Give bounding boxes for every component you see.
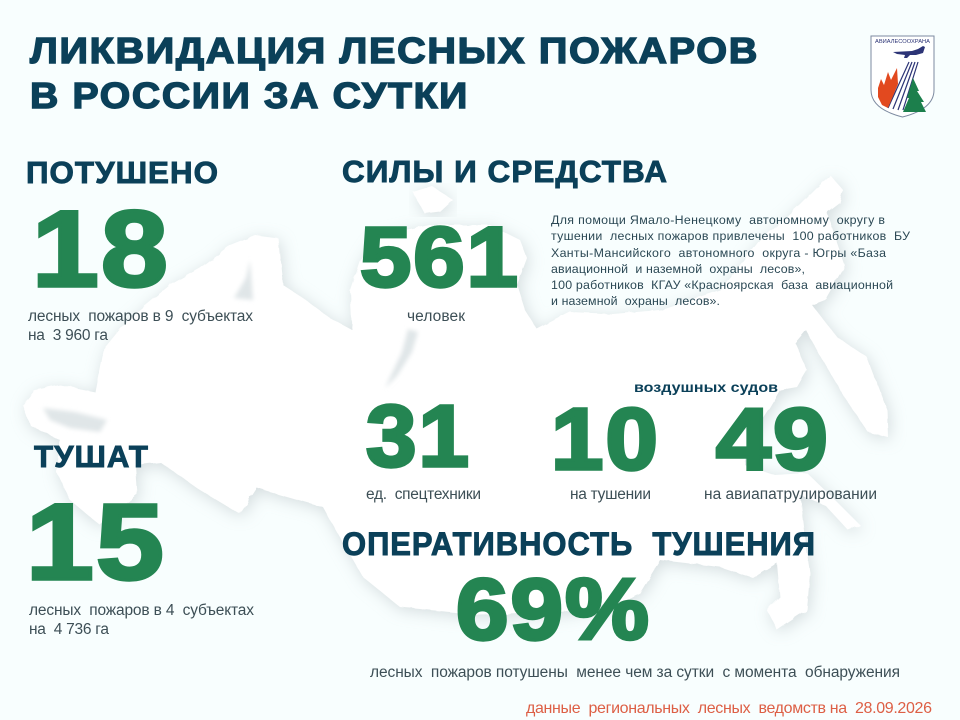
title: В РОССИИ ЗА СУТКИ bbox=[30, 75, 469, 116]
text block: assistance note: 100 работников КГАУ «Красноярская база авиационной bbox=[551, 278, 893, 292]
text block: assistance note: тушении лесных пожаров привлечены 100 работников БУ bbox=[551, 229, 910, 243]
description: лесных пожаров в 9 субъектах bbox=[28, 308, 253, 325]
heading: forces: СИЛЫ И СРЕДСТВА bbox=[342, 154, 668, 189]
heading: potusheno: ПОТУШЕНО bbox=[26, 155, 219, 190]
text block: assistance note: Для помощи Ямало-Ненецкому автономному округу в bbox=[551, 213, 885, 227]
panel: efficiency bbox=[342, 526, 900, 681]
description bbox=[29, 602, 254, 638]
number: 49: 49 bbox=[716, 391, 830, 488]
map of Russia bbox=[23, 175, 888, 630]
text block: assistance note: Ханты-Мансийского автономного округа - Югры «База bbox=[551, 246, 886, 260]
number: 15: 15 bbox=[26, 481, 166, 602]
panel: extinguished bbox=[26, 155, 253, 344]
panel: burning bbox=[26, 439, 254, 638]
description bbox=[28, 308, 253, 344]
description: на 3 960 га bbox=[28, 327, 108, 344]
number: 69%: 69% bbox=[456, 562, 651, 658]
title bbox=[30, 30, 759, 116]
number: 10: 10 bbox=[551, 391, 660, 488]
number: 18: 18 bbox=[32, 188, 170, 309]
description: лесных пожаров в 4 субъектах bbox=[29, 602, 254, 619]
label: people: человек bbox=[407, 308, 465, 325]
label: air patrol: на авиапатрулировании bbox=[704, 486, 877, 503]
number: 31: 31 bbox=[366, 388, 471, 485]
inland seas and gulfs bbox=[43, 260, 418, 432]
panel: forces and means bbox=[342, 154, 910, 503]
label: firefighting: на тушении bbox=[570, 486, 651, 503]
heading: efficiency: ОПЕРАТИВНОСТЬ ТУШЕНИЯ bbox=[342, 526, 816, 562]
label: aircraft: воздушных судов bbox=[634, 379, 778, 395]
label: special equipment: ед. спецтехники bbox=[366, 486, 481, 503]
description: на 4 736 га bbox=[29, 621, 109, 638]
description: лесных пожаров потушены менее чем за сутки с момента обнаружения bbox=[370, 664, 900, 681]
logo: Avialesookhrana shield: АВИАЛЕСООХРАНА bbox=[875, 39, 931, 45]
number: 561: 561 bbox=[360, 210, 520, 304]
text block: assistance note bbox=[551, 213, 910, 308]
logo: Avialesookhrana shield bbox=[871, 36, 934, 117]
heading: tushat: ТУШАТ bbox=[34, 439, 149, 474]
text block: assistance note: авиационной и наземной охраны лесов», bbox=[551, 262, 805, 276]
source note: данные региональных лесных ведомств на 28.09.2026 bbox=[526, 700, 932, 717]
text block: assistance note: и наземной охраны лесов». bbox=[551, 294, 720, 308]
title: ЛИКВИДАЦИЯ ЛЕСНЫХ ПОЖАРОВ bbox=[30, 30, 759, 71]
